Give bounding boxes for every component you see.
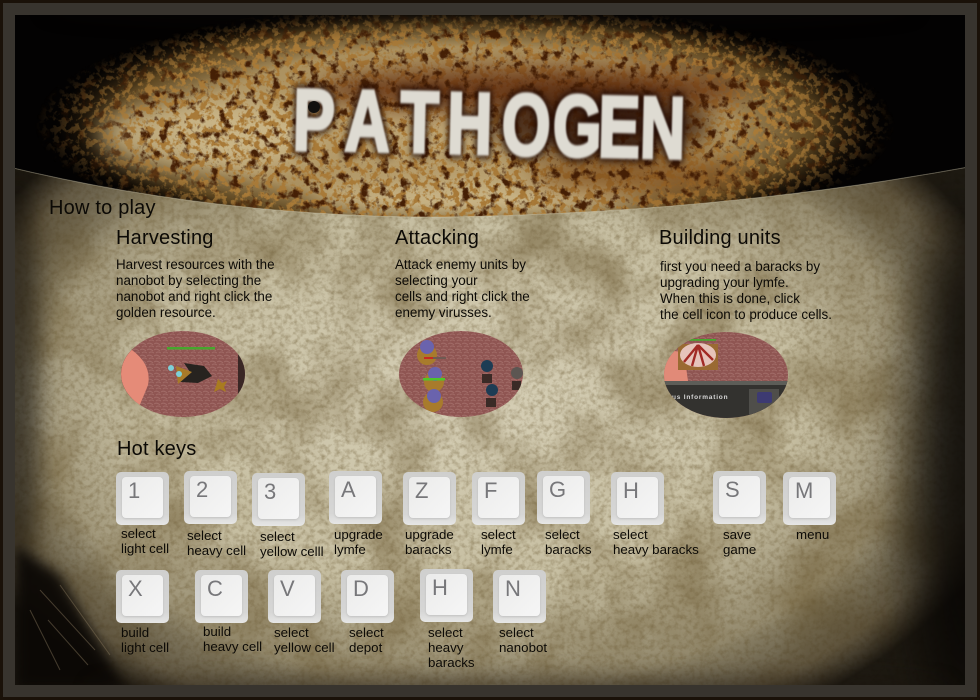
hot key: 2: 2 (196, 477, 208, 502)
label: F: select (481, 527, 516, 542)
lower parchment section (0, 150, 980, 700)
label: A: upgrade (334, 527, 383, 542)
text: attacking instructions: enemy virusses. (395, 305, 492, 320)
text: attacking instructions (395, 257, 530, 320)
game logo: PATHOGEN (292, 72, 686, 178)
hot key: F (472, 472, 525, 525)
hot key: Z: Z (415, 478, 428, 503)
label: D: select (349, 625, 384, 640)
text: building instructions (660, 259, 832, 322)
label: N (499, 625, 547, 655)
text: building instructions: upgrading your lymfe. (660, 275, 789, 290)
label: Z: baracks (405, 542, 452, 557)
hot key: S (713, 471, 766, 524)
hot key: N: N (505, 576, 521, 601)
text: building instructions: the cell icon to produce cells. (660, 307, 832, 322)
text: attacking instructions: selecting your (395, 273, 478, 288)
heading: hot keys: Hot keys (117, 438, 196, 460)
label: Z: upgrade (405, 527, 454, 542)
label: V: select (274, 625, 309, 640)
hot key: H (heavy baracks): H (432, 575, 448, 600)
label: H: heavy baracks (613, 542, 699, 557)
label: 1 (121, 526, 169, 556)
hot key: D: D (353, 576, 369, 601)
hot key: N (493, 570, 546, 623)
screenshot: harvesting (120, 330, 246, 420)
hot key: 3 (252, 473, 305, 526)
game logo: PATHOGEN (292, 72, 686, 178)
label: 3: select (260, 529, 295, 544)
upper dark section (40, 15, 890, 217)
text: harvesting instructions: golden resource. (116, 305, 216, 320)
hot key: 3: 3 (264, 479, 276, 504)
hot key: A (329, 471, 382, 524)
label: 3: yellow celll (260, 544, 324, 559)
hot key: 1 (116, 472, 169, 525)
panel: harvesting (116, 227, 275, 320)
panel: building units (659, 227, 832, 322)
hot key: G (537, 471, 590, 524)
hot key: G: G (549, 477, 566, 502)
hot key: 1: 1 (128, 478, 140, 503)
text: harvesting instructions: Harvest resources with the (116, 257, 275, 272)
label: Z (405, 527, 454, 557)
label: H (heavy baracks) (428, 625, 475, 670)
hot key: H (heavy baracks) (420, 569, 473, 622)
label: C: heavy cell (203, 639, 262, 654)
label: 2 (187, 528, 246, 558)
label: N: select (499, 625, 534, 640)
label: V (274, 625, 335, 655)
label: M: menu (796, 527, 829, 542)
label: H: select (613, 527, 648, 542)
hot key: C: C (207, 576, 223, 601)
label: G (545, 527, 592, 557)
hot key: Z (403, 472, 456, 525)
label: F: lymfe (481, 542, 513, 557)
text: building instructions: When this is done, click (660, 291, 800, 306)
label: V: yellow cell (274, 640, 335, 655)
screenshot: building units (664, 330, 790, 421)
hot key: D (341, 570, 394, 623)
label: N: nanobot (499, 640, 547, 655)
label: S: save (723, 527, 751, 542)
screenshot: building units: us Information (672, 394, 728, 401)
label: X: light cell (121, 640, 169, 655)
label: S (723, 527, 756, 557)
label: C (203, 624, 262, 654)
hot key: C (195, 570, 248, 623)
hot key: 2 (184, 471, 237, 524)
text: harvesting instructions: nanobot by selecting the (116, 273, 261, 288)
corner scratches (15, 545, 125, 690)
hot key: X (116, 570, 169, 623)
label: F (481, 527, 516, 557)
hot key: A: A (341, 477, 356, 502)
heading: harvesting: Harvesting (116, 227, 214, 249)
text: harvesting instructions: nanobot and right click the (116, 289, 272, 304)
screenshot: attacking (398, 330, 524, 420)
label: A (334, 527, 383, 557)
text: attacking instructions: Attack enemy units by (395, 257, 526, 272)
label: 2: heavy cell (187, 543, 246, 558)
hot key: H (611, 472, 664, 525)
panel: attacking (395, 227, 530, 320)
hot key: H: H (623, 478, 639, 503)
label: 3 (260, 529, 324, 559)
heading: building units: Building units (659, 227, 781, 249)
label: D (349, 625, 384, 655)
hot key: V: V (280, 576, 295, 601)
label: 1: light cell (121, 541, 169, 556)
text: attacking instructions: cells and right click the (395, 289, 530, 304)
label: H (heavy baracks): heavy (428, 640, 463, 655)
label: C: build (203, 624, 231, 639)
label: X: build (121, 625, 149, 640)
label: H (heavy baracks): select (428, 625, 463, 640)
label: 1: select (121, 526, 156, 541)
hot key: M: M (795, 478, 813, 503)
label: 2: select (187, 528, 222, 543)
heading: how to play: How to play (49, 197, 156, 219)
label: A: lymfe (334, 542, 366, 557)
hot key: M (783, 472, 836, 525)
hot key: F: F (484, 478, 497, 503)
label: G: select (545, 527, 580, 542)
hot key: S: S (725, 477, 740, 502)
label: D: depot (349, 640, 382, 655)
heading: attacking: Attacking (395, 227, 479, 249)
hot key: X: X (128, 576, 143, 601)
label: H (613, 527, 699, 557)
text: building instructions: first you need a baracks by (660, 259, 820, 274)
text: harvesting instructions (116, 257, 275, 320)
hot key: V (268, 570, 321, 623)
label: S: game (723, 542, 756, 557)
label: H (heavy baracks): baracks (428, 655, 475, 670)
label: G: baracks (545, 542, 592, 557)
label: X (121, 625, 169, 655)
